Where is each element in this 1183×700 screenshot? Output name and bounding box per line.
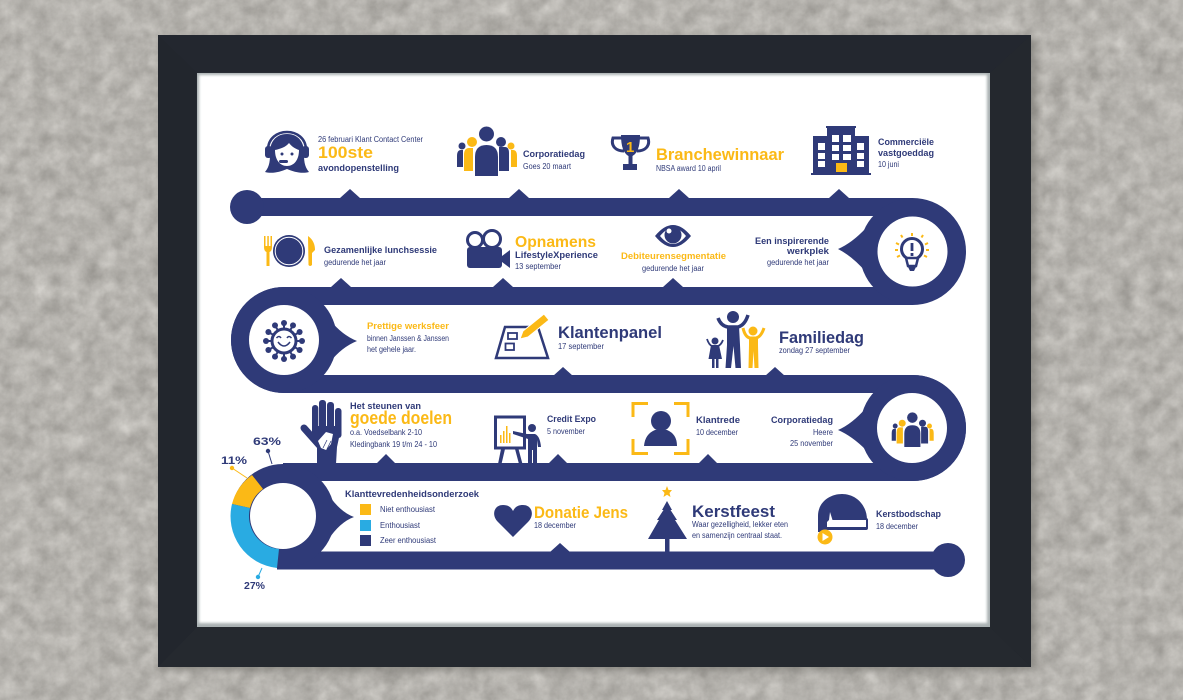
text: Christmas party: Waar gezelligheid, lekker eten	[692, 520, 788, 529]
legend: customer satisfaction: Enthousiast	[380, 521, 421, 530]
text: shared lunch session	[324, 245, 437, 267]
connector: 27%	[258, 568, 262, 577]
text: supporting good causes: o.a. Voedselbank 2-10	[350, 428, 422, 437]
text: supporting good causes: Het steunen van	[350, 401, 421, 411]
text: family day: zondag 27 september	[779, 346, 850, 355]
text: shared lunch session: Gezamenlijke lunchsessie	[324, 245, 437, 255]
text: inspiring workplace: Een inspirerende	[755, 236, 829, 246]
text: commercial real estate day: 10 juni	[878, 160, 899, 169]
picture frame	[158, 35, 1036, 671]
text: shared lunch session: gedurende het jaar	[324, 258, 386, 267]
text: branch winner: Branchewinnaar	[656, 145, 784, 164]
text: Jens donation	[534, 504, 628, 530]
text: corporate day Goes	[523, 149, 585, 171]
text: pleasant work atmosphere: Prettige werksfeer	[367, 321, 450, 331]
text: inspiring workplace: werkplek	[786, 246, 830, 256]
icon: customer speech portrait	[633, 404, 688, 454]
timeline road	[230, 189, 965, 577]
icon: helping hand	[304, 400, 342, 464]
text: debtor segmentation: gedurende het jaar	[642, 264, 704, 273]
text: customer speech: Klantrede	[696, 415, 740, 425]
text: supporting good causes: Kledingbank 19 t/m 24 - 10	[350, 440, 437, 449]
icon: heart	[494, 505, 532, 537]
icon: eye	[655, 225, 691, 247]
text: Christmas party: en samenzijn centraal staat.	[692, 531, 782, 540]
text: corporate day Heere: 25 november	[790, 439, 833, 448]
bubble: inspiring workplace	[838, 198, 966, 304]
text: commercial real estate day: vastgoeddag	[878, 148, 934, 158]
text: corporate day Heere	[771, 415, 833, 448]
bubble: pleasant work atmosphere	[231, 287, 357, 393]
text: customer panel: 17 september	[558, 342, 604, 351]
text: 100ste evening opening: 100ste	[318, 143, 373, 162]
connector: 11%	[232, 468, 247, 478]
text: 100ste evening opening: 26 februari Klant Contact Center	[318, 135, 423, 144]
text: supporting good causes	[350, 401, 452, 449]
text: customer speech: 10 december	[696, 428, 738, 437]
icon: Santa hat with play button	[818, 494, 868, 544]
satisfaction donut chart	[230, 449, 354, 579]
icon: survey clipboard and pencil	[496, 314, 549, 358]
label: 11 percent: 11%	[221, 455, 247, 467]
text: pleasant work atmosphere: binnen Janssen & Janssen	[367, 334, 449, 343]
icon: office building	[811, 126, 871, 175]
text: recordings LifestyleXperience	[515, 234, 598, 271]
text: recordings LifestyleXperience: 13 september	[515, 262, 561, 271]
text: recordings LifestyleXperience: LifestyleXperience	[515, 250, 598, 260]
label: 27 percent: 27%	[244, 581, 265, 592]
text: Credit Expo: 5 november	[547, 427, 585, 436]
text: Christmas message: 18 december	[876, 522, 918, 531]
icon: trophy	[612, 135, 649, 170]
icon: presenter at easel	[496, 417, 541, 464]
text: debtor segmentation	[621, 251, 726, 273]
text: customer speech	[696, 415, 740, 437]
text: branch winner: NBSA award 10 april	[656, 164, 721, 173]
icon: smiling sun	[263, 320, 305, 362]
legend: customer satisfaction: Niet enthousiast	[380, 505, 436, 514]
icon: plate and cutlery	[264, 235, 315, 267]
text: corporate day Goes: Corporatiedag	[523, 149, 585, 159]
text: corporate day Goes: Goes 20 maart	[523, 162, 572, 171]
text: pleasant work atmosphere	[367, 321, 450, 354]
legend: customer satisfaction: Zeer enthousiast	[380, 536, 437, 545]
text: commercial real estate day: Commerciële	[878, 137, 934, 147]
text: Credit Expo	[547, 414, 596, 436]
icon: family	[707, 311, 764, 368]
text: inspiring workplace: gedurende het jaar	[767, 258, 829, 267]
text: debtor segmentation: Debiteurensegmentatie	[621, 251, 726, 261]
text: customer panel	[558, 324, 662, 351]
text: Christmas message: Kerstbodschap	[876, 509, 941, 519]
icon: call centre agent	[265, 132, 309, 173]
text: Christmas party: Kerstfeest	[692, 503, 776, 521]
bubble: corporate day Heere	[838, 375, 966, 481]
text: corporate day Heere: Heere	[813, 428, 833, 437]
text: Christmas party	[692, 503, 788, 540]
icon: group of people	[457, 126, 517, 176]
text: corporate day Heere: Corporatiedag	[771, 415, 833, 425]
label: 63 percent: 63%	[253, 436, 281, 448]
connector: 63%	[268, 451, 272, 464]
text: family day	[779, 328, 864, 355]
icon: film camera	[467, 230, 510, 268]
text: branch winner	[656, 145, 784, 173]
text: Christmas message	[876, 509, 941, 531]
text: commercial real estate day	[878, 137, 934, 169]
text: recordings LifestyleXperience: Opnamens	[515, 234, 596, 251]
text: 100ste evening opening: avondopenstelling	[318, 163, 399, 173]
icon: small group of people	[892, 412, 934, 447]
text: pleasant work atmosphere: het gehele jaar.	[367, 345, 416, 354]
legend: customer satisfaction: Klanttevredenheidsonderzoek	[345, 489, 480, 499]
text: customer panel: Klantenpanel	[558, 324, 662, 342]
text: Credit Expo: Credit Expo	[547, 414, 596, 424]
icon: trophy: 1	[626, 139, 634, 156]
legend: customer satisfaction	[345, 489, 480, 546]
text: supporting good causes: goede doelen	[350, 408, 452, 428]
icon: Christmas tree with star	[648, 486, 687, 552]
text: Jens donation: Donatie Jens	[534, 504, 628, 522]
text: Jens donation: 18 december	[534, 521, 576, 530]
text: inspiring workplace	[755, 236, 830, 267]
text: family day: Familiedag	[779, 328, 864, 347]
icon: light bulb	[895, 233, 929, 271]
text: 100ste evening opening	[318, 135, 423, 173]
